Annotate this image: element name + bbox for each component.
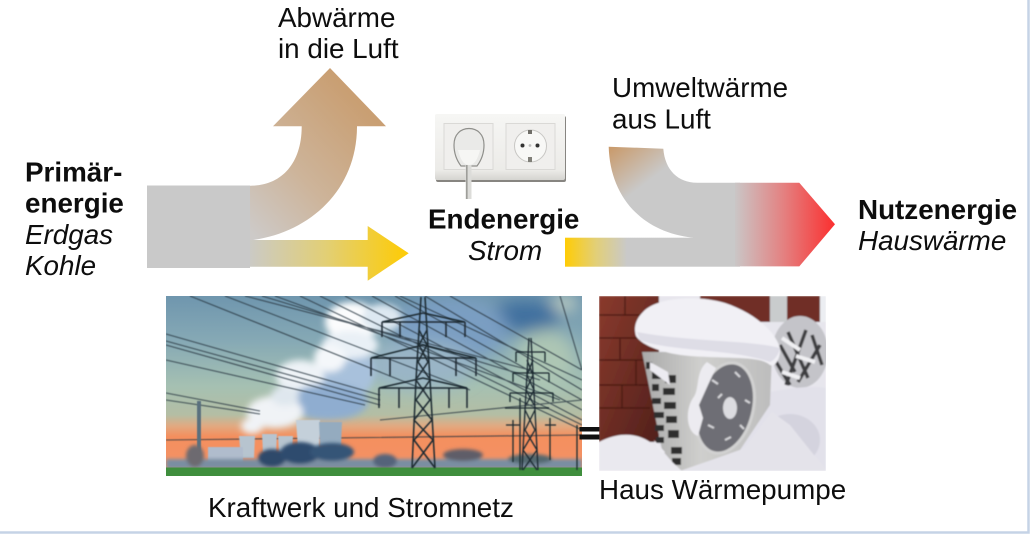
label: waste heat: in die Luft [278, 33, 399, 64]
caption: power plant and grid: Kraftwerk und Stromnetz [208, 492, 514, 523]
snow on ground [599, 435, 682, 471]
icon: wall socket with plug [435, 114, 566, 199]
arrow: electricity output from power plant [250, 226, 409, 281]
smoke plume [241, 302, 402, 434]
label: ambient heat [612, 72, 788, 134]
fan [698, 362, 756, 454]
cooling towers [239, 420, 342, 458]
label: useful energy: Hauswärme [858, 225, 1006, 256]
label: final energy: Strom [468, 235, 542, 266]
dark cloud [365, 295, 577, 390]
photo: snow-covered heat pump [599, 296, 828, 471]
brick wall [599, 296, 659, 442]
main pylon [371, 297, 476, 468]
fan frost [688, 362, 716, 436]
label: ambient heat: aus Luft [612, 104, 711, 134]
chimney [197, 401, 201, 463]
label: waste heat [278, 2, 399, 64]
label: final energy [428, 204, 579, 266]
equals sign [580, 427, 600, 440]
arrow: ambient heat, electricity and useful heat [565, 147, 835, 267]
label: primary energy: Kohle [25, 250, 96, 281]
label: primary energy [25, 156, 124, 281]
overhead power lines [166, 296, 582, 440]
label: useful energy: Nutzenergie [858, 194, 1017, 225]
label: useful energy [858, 194, 1017, 256]
label: final energy: Endenergie [428, 204, 579, 234]
caption: house heat pump: Haus Wärmepumpe [599, 474, 846, 505]
vent frost [650, 362, 670, 458]
label: primary energy: Erdgas [25, 219, 113, 250]
label: primary energy: energie [25, 188, 124, 218]
bush [772, 316, 828, 388]
building [207, 446, 244, 462]
ground [166, 468, 582, 476]
second pylon [505, 338, 577, 470]
unit body [642, 352, 772, 471]
photo: power plant and power grid [166, 295, 582, 476]
label: ambient heat: Umweltwärme [612, 72, 788, 103]
block: primary energy input [147, 186, 250, 268]
vent grille [646, 362, 682, 465]
arrow: waste heat into the air [250, 68, 386, 240]
right ground snow [700, 387, 826, 471]
label: primary energy: Primär- [25, 156, 122, 188]
snow cap [635, 298, 780, 366]
label: waste heat: Abwärme [278, 2, 395, 33]
tree line [166, 442, 582, 469]
